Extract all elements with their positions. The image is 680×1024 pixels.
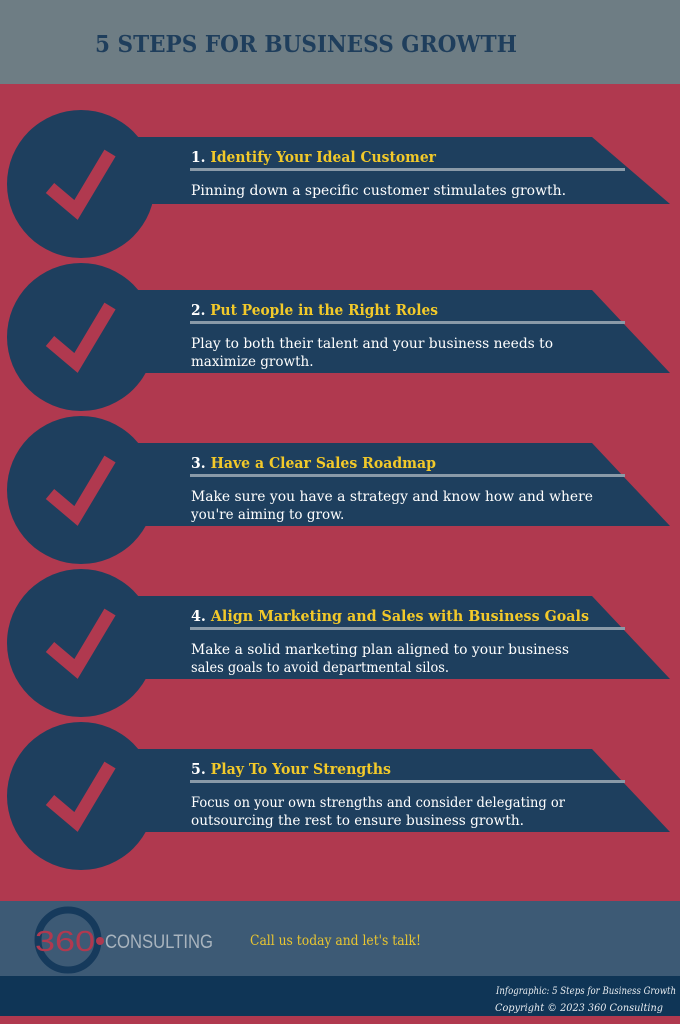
- call to action: Call us today and let's talk!: [250, 933, 421, 949]
- step 2: maximize growth.: [191, 354, 313, 370]
- step 3: [7, 416, 670, 564]
- footer: [0, 901, 680, 1016]
- step 4: [7, 569, 670, 717]
- title: 5 STEPS FOR BUSINESS GROWTH: [95, 31, 517, 58]
- step 1: [7, 110, 670, 258]
- step 2: [7, 263, 670, 411]
- step 3: you're aiming to grow.: [190, 507, 344, 523]
- step 5: outsourcing the rest to ensure business growth.: [191, 813, 524, 829]
- footer: Copyright © 2023 360 Consulting: [495, 1002, 663, 1014]
- header: [0, 0, 680, 84]
- step 5: Focus on your own strengths and consider delegating or: [191, 795, 566, 811]
- logo: [35, 910, 213, 970]
- step 3: Make sure you have a strategy and know how and where: [191, 489, 593, 505]
- step 1: Pinning down a specific customer stimulates growth.: [191, 183, 566, 199]
- step 4: 4. Align Marketing and Sales with Business Goals: [191, 607, 589, 625]
- step 2: 2. Put People in the Right Roles: [191, 301, 438, 319]
- logo: 360: [35, 926, 95, 958]
- step 4: Make a solid marketing plan aligned to your business: [191, 642, 569, 658]
- step 5: [7, 722, 670, 870]
- step 1: 1. Identify Your Ideal Customer: [191, 148, 437, 166]
- step 2: Play to both their talent and your business needs to: [191, 336, 553, 352]
- step 3: 3. Have a Clear Sales Roadmap: [191, 454, 436, 472]
- step 5: 5. Play To Your Strengths: [191, 760, 391, 778]
- step 4: sales goals to avoid departmental silos.: [191, 660, 449, 676]
- logo: CONSULTING: [105, 932, 213, 953]
